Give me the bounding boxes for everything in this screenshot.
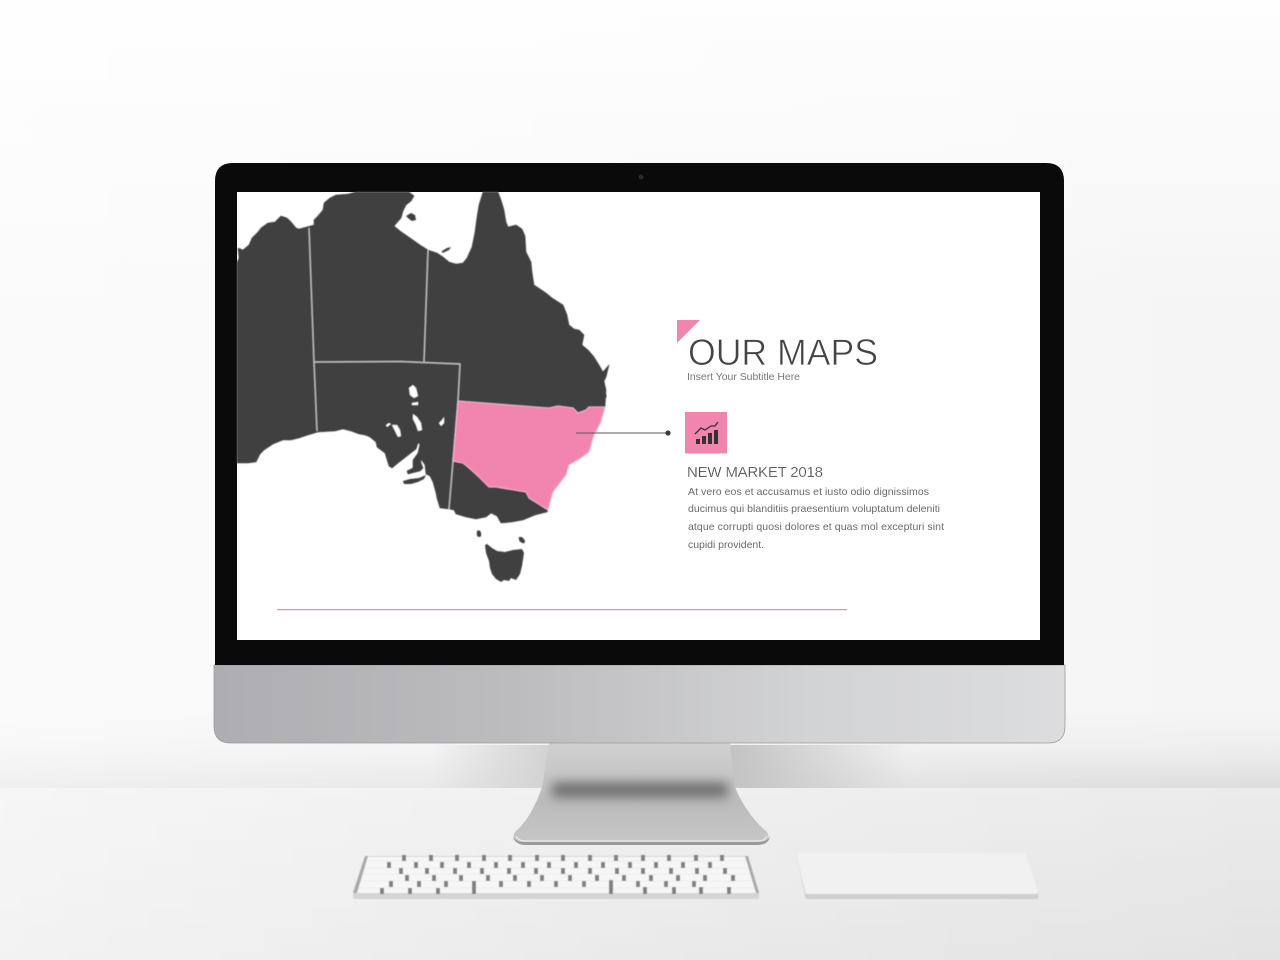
- New South Wales: [453, 401, 605, 510]
- body text: ducimus qui blanditiis praesentium voluptatum deleniti: [688, 503, 940, 515]
- webcam: [639, 175, 643, 179]
- map of Australia: [237, 192, 609, 582]
- key row lines: [356, 861, 755, 888]
- body text: [688, 486, 944, 551]
- heading: new market: NEW MARKET 2018: [687, 464, 823, 481]
- inland lakes: [386, 385, 444, 437]
- mainland: [237, 192, 609, 523]
- footer rule: [277, 609, 847, 610]
- screen: [237, 192, 1040, 640]
- monitor chin: [214, 665, 1065, 743]
- Fraser Island: [604, 393, 606, 399]
- keyboard: [353, 855, 759, 899]
- body text: cupidi provident.: [688, 539, 764, 551]
- monitor bezel: [215, 163, 1064, 665]
- icon: rising bar chart: [685, 412, 727, 454]
- trackpad: [797, 853, 1038, 899]
- keyboard side edges: [353, 856, 759, 893]
- Gulf island: [442, 247, 451, 253]
- body text: atque corrupti quosi dolores et quas mol excepturi sint: [688, 521, 944, 533]
- title: OUR MAPS: [688, 331, 878, 373]
- monitor stand: [513, 743, 770, 845]
- title accent triangle: [677, 320, 700, 343]
- connector line: [576, 430, 671, 436]
- body text: At vero eos et accusamus et iusto odio dignissimos: [688, 486, 929, 498]
- Kangaroo Island: [403, 475, 426, 484]
- Bass Strait islands: [477, 530, 525, 543]
- Groote Eylandt: [406, 213, 416, 221]
- key gaps: [380, 855, 735, 894]
- state borders: [309, 228, 460, 509]
- subtitle: Insert Your Subtitle Here: [687, 371, 800, 383]
- Tasmania: [485, 544, 524, 582]
